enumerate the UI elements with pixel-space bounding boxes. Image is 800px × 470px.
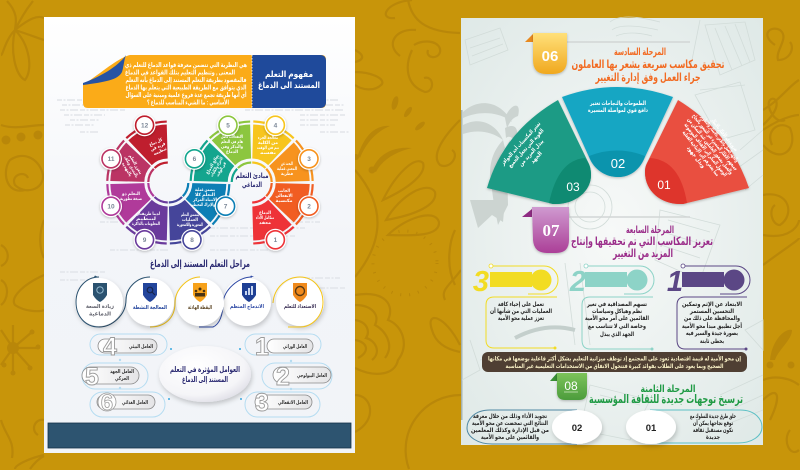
stage 2: orchestrated immersion [199, 276, 271, 327]
banner heading: المستند الى الدماغ [258, 80, 320, 91]
factor pill 3: 3 [255, 389, 269, 417]
segment 5 [209, 110, 271, 172]
factor pill 5: العامل الجهد [110, 369, 134, 375]
step 2 text box: القائمين على أمر محو الأمية [585, 314, 649, 322]
item 02 [467, 410, 602, 444]
segment 3: المعنى عملية [277, 166, 297, 171]
fan segment 02: 02 [611, 156, 625, 171]
item 02: 02 [572, 423, 582, 434]
stage 4: active processing: المعالجة النشطة [133, 305, 167, 311]
segment 3 [262, 140, 325, 202]
segment 11: 11 [108, 156, 115, 163]
segment 3: البحث عن [281, 161, 293, 166]
factor pill 1: 1 [255, 333, 269, 361]
segment 7: والإدراك المحيطي [191, 202, 215, 207]
step 2 text box: تسهم المصداقية في تغير [586, 301, 647, 308]
heading: stage 07: تعزيز المكاسب التي تم تحقيقها وإنتاج [571, 236, 713, 249]
segment 9: المعلومات بالذاكرة [132, 221, 160, 226]
panel: change management poster [461, 17, 763, 445]
banner heading [258, 69, 320, 91]
background line art [462, 17, 763, 440]
segment 1 [232, 193, 294, 255]
segment 2: الانفعالي [276, 193, 293, 198]
fan segment 01: الوصول المبكر إلى الأهداف الموضوعة [682, 121, 729, 178]
factor pill 6: 6 [101, 390, 113, 415]
factor pill 5 [82, 363, 148, 391]
factor pill 1 [245, 333, 321, 361]
fan segment 01: وبذل جهود [685, 145, 706, 170]
fan segment 03: 03 [566, 180, 580, 194]
banner body text: الذي يتوافق مع الطريقة الطبيعية التي يتعلم بها الدماغ [126, 84, 246, 92]
segment 10: صبغة تطورية [120, 196, 142, 201]
segment 6: 6 [193, 156, 197, 163]
step 2 text box: الجهد الذي يبذل [600, 331, 634, 338]
fan segment 01: ضرورة دعم الأفكار بالابتكار [709, 116, 740, 153]
segment 7 [183, 183, 237, 224]
factor pill 6: العامل الغذائي [122, 400, 148, 406]
banner body text [125, 62, 247, 106]
segment 2 [266, 183, 320, 224]
segment 12: فريد في [149, 141, 166, 152]
segment 7: 7 [224, 204, 228, 210]
heading: stage 07: المرحلة السابعة [626, 225, 674, 236]
segment 12: تنظيمه [153, 146, 168, 156]
footer bar [48, 423, 351, 448]
segment 3: 3 [307, 156, 311, 163]
segment 5: الدماغ [226, 149, 238, 154]
segment 6: في الوقت [215, 161, 227, 177]
heading: stage 08 [550, 373, 743, 407]
segment 11 [100, 140, 154, 182]
segment 7: التعلم كلا [195, 192, 215, 197]
segment 1: معقد [259, 220, 271, 225]
item 02: تجويد الأداء وذلك من خلال معرفة [473, 412, 547, 420]
fan segment 03 [487, 100, 591, 204]
central ellipse: المستند إلى الدماغ [182, 375, 228, 384]
segment 2: 2 [307, 204, 311, 210]
step 2 text box: وخاصة التي لا تتناسب مع [588, 323, 646, 330]
heading: stage 07: المزيد من التغيير [612, 248, 673, 260]
segment 4 [252, 114, 294, 168]
heading: stage 08: 08 [564, 379, 578, 393]
stage 3: relaxed alertness [150, 277, 224, 327]
segment 5: الانفعالات عامل [221, 134, 243, 139]
segment 10 [95, 163, 158, 225]
segment 1: 1 [274, 237, 278, 244]
item 02: النتائج التي تمخضت عن محو الأمية [472, 419, 548, 427]
central ellipse: العوامل المؤثرة في التعلم [170, 365, 240, 374]
fan segment 01 [645, 100, 750, 204]
fan segment 01: والجهد العمل بإخلاص بالابتكار والتطوير [699, 113, 740, 164]
segment 8: الشعورية واللاشعورية [177, 222, 203, 227]
segment 11: بالتحدي ويكف [123, 155, 140, 179]
central ellipse [159, 346, 251, 402]
item 01: خلق طرق جديدة للسلوك مع [690, 413, 736, 420]
segment 11: يتعزز التعلم [128, 153, 144, 175]
step 1 text box: أجل تطبيق مبدأ محو الأمية [682, 322, 742, 330]
chart: three-part fan [487, 87, 750, 204]
step 3: 3 [473, 266, 489, 298]
segment 3: فطرية [281, 171, 293, 176]
step 2 text box: نظم وهياكل وسياسات [592, 308, 642, 315]
fan segment 03: الجهد [530, 151, 544, 165]
fan segment 01: والعمل بشعور العاملين عند التمكن من [686, 116, 735, 176]
stage 1: readiness [273, 277, 324, 327]
segment 1: الدماغ [259, 210, 271, 215]
heading: stage 07: 07 [542, 221, 560, 240]
heading: stage 06: 06 [542, 48, 558, 65]
segment 7: الانتباه المركز [192, 197, 217, 202]
item 01: تكون مستقبل ثقافة [693, 427, 733, 434]
heading: stage 06: جراء العمل وفق إدارة التغيير [595, 72, 700, 85]
step 3 [473, 264, 558, 350]
segment 6: يعالج الدماغ [205, 153, 220, 175]
step 1 text box: بخطى ثابتة [700, 338, 724, 345]
segment 4: معالجة الجزء [258, 135, 278, 140]
heading: stage 06: المرحلة السادسة [614, 47, 666, 58]
stages row [75, 276, 324, 327]
step 2 text box [582, 297, 654, 350]
callout: literacy economic value: الصحيح وبما يعود على الطلاب بفوائد كبيرة فتتحول الانفاق من الاستخدامات التعليمية غير المناسبة [506, 363, 724, 370]
banner body text: فالمقصود بطريقة التعلم المستند إلى الدماغ بأنه التعلم [126, 75, 246, 84]
segment 9: لتنظيم [136, 216, 156, 221]
factor pill 4 [90, 333, 167, 361]
factor pill 4: العامل البيئي [129, 344, 153, 350]
step 2 [569, 264, 654, 350]
stage 5: increasing brain capacity: زيادة السعة [86, 304, 114, 310]
segment 4: تتم في الوقت [257, 145, 279, 150]
panel: brain-based learning poster [44, 17, 355, 453]
factor pill 2 [262, 363, 332, 391]
item 02: والقائمين على محو الأمية [481, 433, 539, 441]
stage 2: orchestrated immersion: الاندماج المنظم [230, 304, 264, 310]
fan segment 01: جميعهم الأفكار المتميزة عبر الشعور بالنجاح [691, 112, 740, 172]
segment 6 [183, 140, 237, 182]
segment 10: التعلم ذو [121, 191, 140, 196]
step 1 text box: بصورة جيدة والسير فيه [686, 330, 738, 337]
callout: literacy economic value [482, 352, 747, 372]
stage 3: relaxed alertness: اليقظة الهادئة [188, 305, 212, 311]
factor pill 4: 4 [103, 333, 117, 361]
step 3 text box [486, 297, 557, 350]
segment 2: مكتسبة [276, 198, 293, 203]
step 1 text box: والمحافظة على ذلك من [684, 315, 740, 322]
item 01 [626, 410, 762, 444]
segment 5: 5 [226, 122, 230, 130]
stage 5: increasing brain capacity [75, 276, 123, 327]
banner: brain-based learning concept [83, 55, 326, 108]
segment 11: بالتهديد [121, 161, 133, 178]
segment 5: هام في التعلم [221, 139, 243, 144]
heading: stage 06 [525, 33, 724, 85]
segment 4: من الكلية [258, 140, 278, 145]
factors diagram [82, 333, 332, 417]
segment 4: 4 [274, 122, 278, 130]
fan segment 03: يبذل المزيد من [518, 139, 545, 168]
factor pill 5: الحركي [115, 375, 129, 382]
step 1 text box: الابتعاد عن الإثم وتمكين [682, 301, 742, 308]
heading: brain learning principles [236, 173, 268, 189]
step 1 text box: التحسين المستمر [689, 308, 734, 315]
segment 4: نفسه [260, 150, 276, 155]
heading: stage 08: المرحلة الثامنة [640, 384, 696, 395]
fan segment 02: دافع قوي لمواصلة المسيرة [588, 108, 648, 114]
item 01: جديدة [706, 435, 720, 441]
segment 5: والتذكر وفي [221, 144, 243, 149]
fan segment 02: الطموحات والنجاحات تعتبر [589, 101, 646, 107]
fan segment 01: مما يشعرهم إلى الإنتاجية الفعلية [681, 130, 720, 178]
segment 10: 10 [107, 204, 115, 210]
fan segment 02 [562, 87, 673, 177]
step 3 text box: تعمل على إحياء كافة [498, 301, 544, 308]
segment 8: يتضمن التعلم [181, 212, 199, 217]
item 01: توقع نجاحها يمكن أن [693, 419, 733, 427]
connector dots [168, 348, 242, 400]
banner body text: أي أنها طريقة تجمع عدة فروع علمية ومبنية على السؤال [126, 90, 246, 99]
callout: literacy economic value: إن محو الأمية له قيمة اقتصادية تعود على المجتمع إذ توظف ميزانية التعليم بشكل أكثر فاعلية بوضعها في مكانها [488, 354, 741, 362]
world map dots [57, 100, 350, 288]
step 1: 1 [667, 266, 683, 298]
segment 12: 12 [141, 122, 149, 130]
heading: stage 07 [522, 207, 713, 260]
stage 4: active processing [99, 277, 174, 327]
factor pill 3: العامل الانفعالي [278, 400, 308, 406]
factor pill 2: العامل البيولوجي [297, 373, 327, 379]
segment 6: الأجزاء والكليات [208, 155, 224, 178]
step 1 [667, 264, 750, 350]
heading: stage 06: تحقيق مكاسب سريعة يشعر بها العاملون [572, 59, 724, 72]
fan segment 03: تعتبر المكتسبات أحد الحوافز [498, 120, 542, 167]
heading: brain learning principles: الدماغي [242, 182, 262, 189]
banner heading: مفهوم التعلم [265, 69, 313, 80]
banner body text: الأساسي : ما الشيء المناسب للدماغ ؟ [147, 98, 229, 106]
segment 8: 8 [190, 237, 194, 244]
segment 9: 9 [143, 237, 147, 244]
factor pill 2: 2 [276, 363, 290, 391]
segment 8 [149, 193, 211, 255]
step 3 text box: العمليات التي من شأنها أن [490, 307, 552, 315]
factor pill 5: 5 [85, 363, 99, 391]
segment 2: الجانب [278, 188, 290, 193]
item 02: من قبل الإدارة وكذلك المعلمين [471, 427, 549, 434]
banner body text: المعنى , وتنظيم التعليم بتلك القواعد في الدماغ [125, 70, 235, 76]
chart: principles wheel right [183, 110, 325, 255]
factor pill 3 [245, 389, 320, 417]
fan segment 01: 01 [657, 178, 671, 192]
segment 8: العمليات [182, 217, 198, 222]
step 1 text box [677, 297, 748, 350]
heading: brain learning principles: مبادئ التعلم [236, 173, 268, 180]
chart: principles wheel left [95, 110, 237, 255]
banner body text: هي النظرية التي تتضمن معرفة قواعد الدماغ للتعلم ذي [125, 62, 247, 69]
step 2: 2 [569, 266, 586, 298]
factor pill 1: العامل الوراثي [283, 344, 307, 350]
factor pill 6 [90, 390, 165, 417]
segment 9 [126, 197, 168, 251]
fan segment 03: القوية التي تجعل الجميع [508, 128, 546, 169]
stage 1: readiness: الاستعداد للتعلم [284, 304, 316, 310]
segment 12: كل دماغ [148, 137, 163, 147]
icon: palm tree [463, 103, 519, 228]
stage 5: increasing brain capacity: الدماغية [89, 312, 111, 318]
heading: stages of brain-based learning: مراحل التعلم المستند إلى الدماغ [150, 259, 250, 270]
item 01: 01 [646, 423, 657, 434]
segment 7: يتضمن عملية [195, 187, 215, 192]
segment 9: لدينا طريقتان [136, 211, 160, 216]
segment 1: متكامل الأداء [256, 214, 274, 220]
segment 12 [126, 110, 188, 172]
step 3 text box: تعزز عملية محو الأمية [498, 314, 544, 322]
